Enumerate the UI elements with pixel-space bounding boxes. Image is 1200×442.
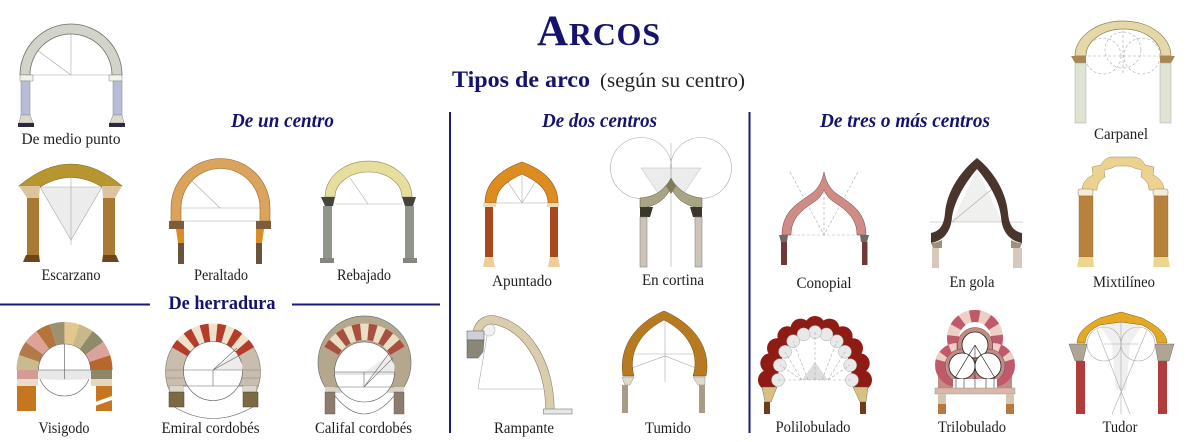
label: Tumido xyxy=(645,420,691,437)
label: Tudor xyxy=(1102,419,1138,436)
arch: En cortina xyxy=(610,138,732,289)
arch: De medio punto xyxy=(18,24,125,148)
arch: Rebajado xyxy=(320,161,417,284)
label: Trilobulado xyxy=(938,419,1006,436)
label: Apuntado xyxy=(492,273,552,290)
label: Carpanel xyxy=(1094,126,1148,143)
arch: Polilobulado xyxy=(758,316,872,436)
heading: De un centro: De un centro xyxy=(230,110,334,132)
subtitle: Tipos de arco xyxy=(452,67,590,92)
arch: Mixtilíneo xyxy=(1077,157,1170,291)
arch: Escarzano xyxy=(19,164,122,284)
label: Rebajado xyxy=(337,267,391,284)
arch: Trilobulado xyxy=(935,310,1015,436)
arch: Rampante xyxy=(467,320,572,437)
label: Polilobulado xyxy=(776,419,851,436)
label: Emiral cordobés xyxy=(162,420,260,437)
heading: De herradura: De herradura xyxy=(168,293,276,314)
arch: En gola xyxy=(930,158,1023,291)
label: De medio punto xyxy=(22,131,121,148)
label: Mixtilíneo xyxy=(1093,274,1155,291)
label: Rampante xyxy=(494,420,554,437)
arch: Tudor xyxy=(1069,312,1174,436)
rule left of De herradura xyxy=(0,304,150,306)
arch: Apuntado xyxy=(483,162,560,290)
arch: Peraltado xyxy=(169,158,271,284)
arch: Visigodo xyxy=(13,318,116,437)
divider: right column xyxy=(748,112,750,433)
heading: De tres o más centros: De tres o más centros xyxy=(819,110,990,132)
label: Visigodo xyxy=(38,420,90,437)
rule right of De herradura xyxy=(292,304,440,306)
label: En cortina xyxy=(642,272,704,289)
title: ARCOS xyxy=(537,8,660,55)
label: Escarzano xyxy=(42,267,101,284)
arch: Califal cordobés xyxy=(312,316,417,437)
arch: Tumido xyxy=(622,311,707,437)
divider: left column xyxy=(449,112,451,433)
subtitle note: (según su centro) xyxy=(600,70,745,92)
label: Califal cordobés xyxy=(315,420,412,437)
label: Peraltado xyxy=(194,267,248,284)
heading: De dos centros: De dos centros xyxy=(541,110,657,132)
arch: Conopial xyxy=(779,172,869,292)
label: En gola xyxy=(950,274,995,291)
arch: Emiral cordobés xyxy=(160,318,266,437)
arch: Carpanel xyxy=(1071,21,1175,143)
label: Conopial xyxy=(796,275,852,292)
